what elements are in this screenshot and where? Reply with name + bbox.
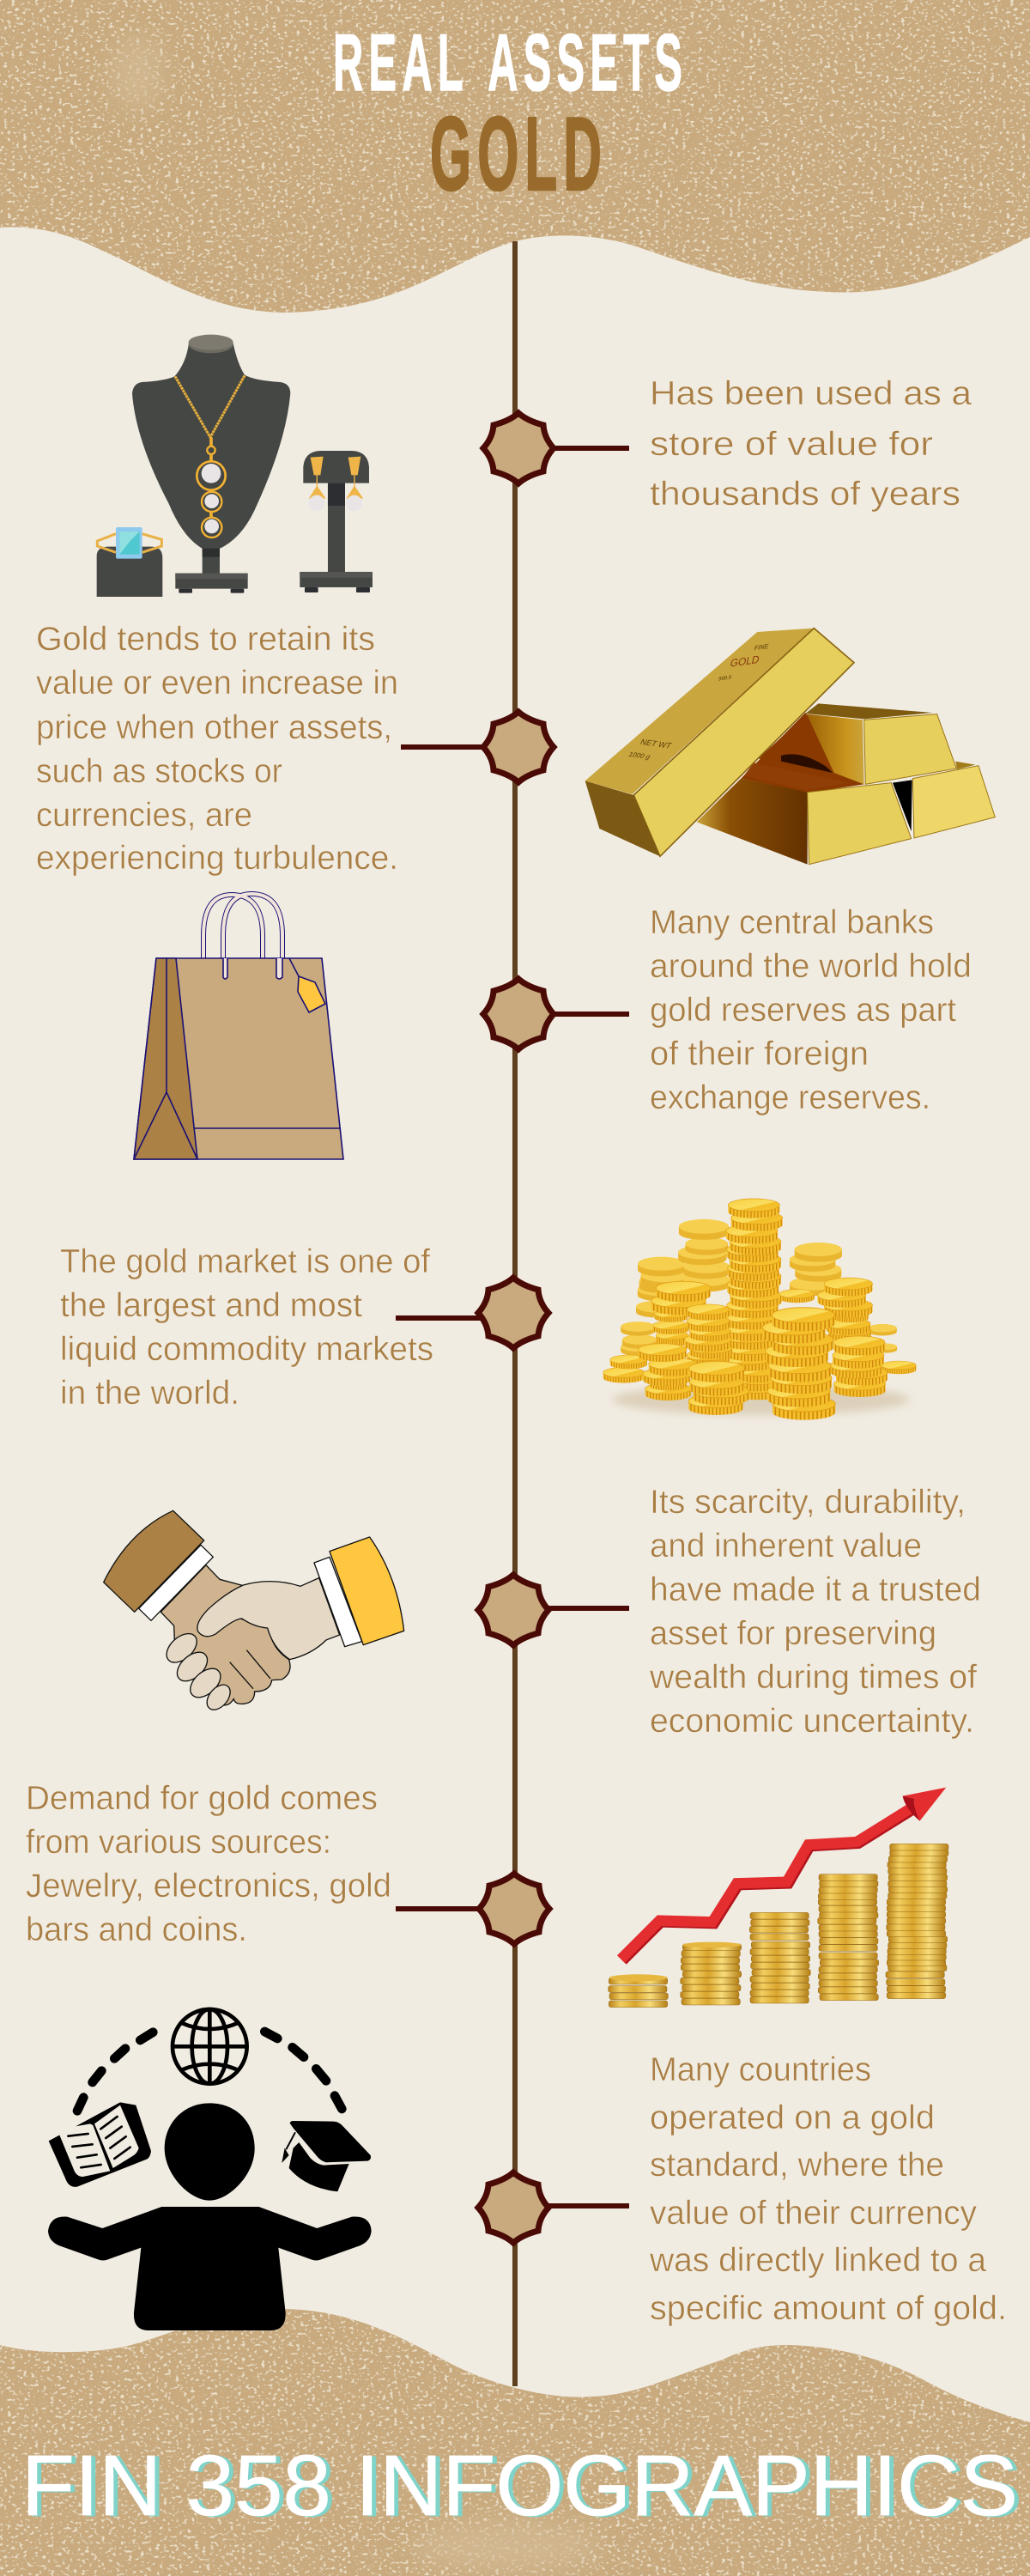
text: gold market: The gold market is one of [60, 1243, 430, 1280]
icon: jewelry display [97, 335, 373, 597]
node 4 with connector [396, 1278, 548, 1348]
icon: gold bars: FINE [754, 642, 769, 652]
globe [173, 2009, 247, 2084]
text: scarcity: wealth during times of [649, 1659, 977, 1696]
title: real assets: REAL ASSETS [333, 17, 688, 107]
text: gold standard: Many countries [650, 2051, 871, 2088]
text: retains value: experiencing turbulence. [36, 840, 398, 877]
node 7 with connector [478, 2172, 629, 2243]
node 5 with connector [478, 1575, 629, 1645]
icon: shopping bag [134, 894, 343, 1159]
text: retains value: currencies, are [36, 797, 252, 834]
text: central banks: gold reserves as part [650, 992, 956, 1029]
icon: gold bars: GOLD [729, 653, 760, 670]
text: retains value: price when other assets, [36, 709, 392, 746]
text: scarcity: have made it a trusted [650, 1571, 981, 1608]
icon: coin pile [603, 1199, 916, 1420]
icon: handshake [104, 1510, 404, 1714]
text: store of value [650, 375, 972, 513]
text: retains value: such as stocks or [36, 753, 282, 790]
text: gold standard [649, 2051, 1007, 2327]
text: central banks: Many central banks [650, 904, 934, 941]
text: store of value: thousands of years [650, 476, 960, 513]
text: demand [26, 1780, 391, 1948]
icon: rising coin chart [609, 1788, 948, 2008]
text: central banks: exchange reserves. [650, 1079, 930, 1116]
text: central banks [650, 904, 972, 1116]
text: demand: bars and coins. [26, 1911, 247, 1948]
text: retains value [36, 621, 398, 877]
top wavy header band [0, 0, 1030, 313]
icon: person juggling knowledge [48, 2009, 372, 2330]
text: gold market: in the world. [60, 1375, 239, 1412]
text: retains value: value or even increase in [36, 665, 398, 702]
chart stack 2 [681, 1942, 742, 2005]
text: demand: Jewelry, electronics, gold [26, 1868, 391, 1905]
text: central banks: of their foreign [650, 1036, 869, 1072]
text: gold market: the largest and most [60, 1287, 362, 1324]
node 2 with connector [401, 712, 554, 782]
node 3 with connector [483, 979, 629, 1049]
node 6 with connector [396, 1874, 549, 1944]
text: gold standard: value of their currency [650, 2195, 977, 2232]
bottom wavy footer band [0, 2309, 1030, 2576]
footer title: FIN 358 INFOGRAPHICS [21, 2438, 1018, 2534]
chart stack 3 [749, 1912, 810, 2003]
text: gold standard: standard, where the [650, 2147, 944, 2184]
dashed arc [77, 2032, 342, 2111]
chart stack 4 [818, 1874, 879, 2001]
chart stack 5 [886, 1844, 948, 1999]
text: scarcity: asset for preserving [650, 1615, 936, 1652]
text: gold market: liquid commodity markets [60, 1331, 433, 1368]
text: scarcity: and inherent value [650, 1528, 922, 1564]
text: demand: Demand for gold comes [26, 1780, 378, 1817]
title: gold: GOLD [430, 95, 608, 212]
text: demand: from various sources: [26, 1824, 331, 1861]
central timeline line [512, 241, 518, 2386]
text: retains value: Gold tends to retain its [36, 621, 375, 658]
book [49, 2102, 151, 2187]
text: gold standard: was directly linked to a [649, 2242, 986, 2279]
text: scarcity: economic uncertainty. [650, 1703, 974, 1740]
chart stack 1 [609, 1974, 668, 2008]
text: scarcity [649, 1484, 981, 1740]
icon: gold bars: NET WT [639, 738, 673, 750]
text: gold standard: operated on a gold [650, 2099, 935, 2136]
text: store of value: Has been used as a [650, 375, 972, 412]
icon: gold bars [585, 629, 995, 865]
icon: gold bars: 1000 g [627, 750, 652, 761]
icon: gold bars: 999.9 [718, 674, 732, 683]
graduation cap [282, 2121, 371, 2191]
node 1 with connector [483, 413, 629, 483]
text: gold market [60, 1243, 433, 1412]
text: gold standard: specific amount of gold. [650, 2290, 1007, 2327]
text: scarcity: Its scarcity, durability, [650, 1484, 966, 1521]
text: central banks: around the world hold [650, 948, 972, 985]
text: store of value: store of value for [650, 426, 933, 463]
